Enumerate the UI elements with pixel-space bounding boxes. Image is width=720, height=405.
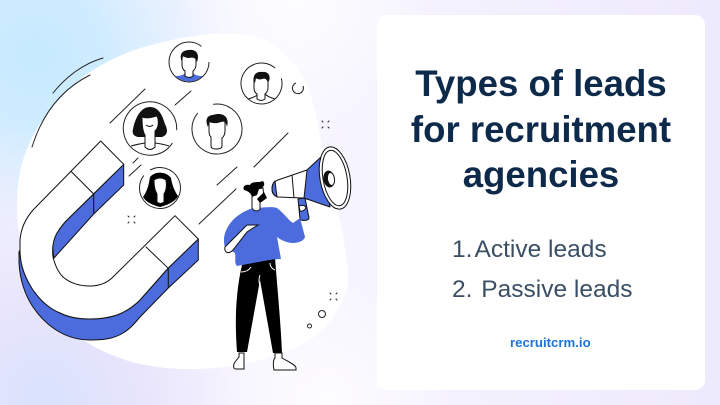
trousers <box>236 257 282 353</box>
title <box>411 63 671 195</box>
list: 2. Passive leads <box>452 276 632 303</box>
motion lines <box>32 58 288 224</box>
avatar: woman large <box>113 92 187 165</box>
avatar: bottom woman <box>132 160 188 216</box>
head <box>252 188 264 211</box>
avatar: top, blue shirt <box>169 42 209 82</box>
white blob background <box>17 33 348 369</box>
website link: recruitcrm.io <box>510 335 591 350</box>
megaphone <box>272 144 355 220</box>
sparkle marks <box>128 121 337 300</box>
list <box>452 236 632 303</box>
avatar: center man <box>188 100 246 158</box>
title: for recruitment <box>411 108 671 150</box>
avatar: top right <box>236 58 287 109</box>
arm and hand <box>225 225 258 253</box>
decorative ring top <box>292 83 303 94</box>
text card <box>377 15 705 390</box>
small rings <box>308 310 326 328</box>
shirt <box>224 207 305 266</box>
left shoe <box>234 353 244 369</box>
magnet <box>19 141 198 340</box>
man figure <box>224 181 305 370</box>
list: 1. Active leads <box>452 236 607 263</box>
title: Types of leads <box>415 63 667 104</box>
right shoe <box>273 353 296 370</box>
title: agencies <box>463 154 619 195</box>
